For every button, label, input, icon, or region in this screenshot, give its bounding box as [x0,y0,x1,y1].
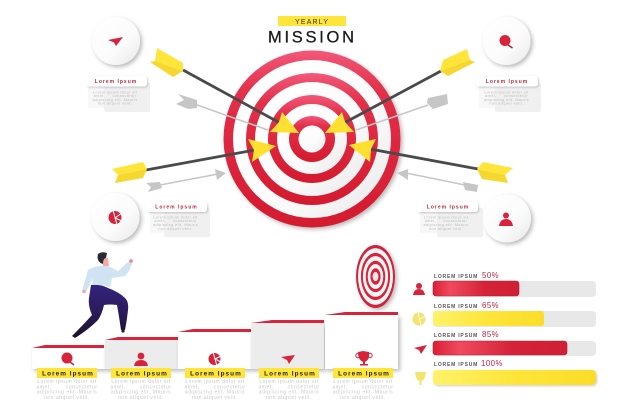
callout: top left: Lorem ipsum dolor sit [93,90,138,94]
callout: lower right: Lorem ipsum dolor sit [424,215,469,219]
arrow: grey lower left [146,169,226,192]
progress bar 4: LOREM IPSUM [434,362,478,368]
progress bar 2: 65% [482,301,499,310]
step 2: adipiscing elit. Mauris [111,390,171,396]
progress bar 1 [413,271,596,297]
callout: top right: non aliquet velit. [489,102,524,106]
title [268,16,354,46]
callout: top right: adipiscing elit. Mauris [484,98,529,102]
callout: top right: Lorem Ipsum [486,79,528,85]
arrow: yellow lower left [112,139,276,183]
step 4: Lorem Ipsum [264,370,316,377]
step 3: adipiscing elit. Mauris [185,390,245,396]
callout: lower right: adipiscing elit. Mauris [423,223,469,227]
icon: plane [281,355,295,364]
step 5: non aliquet velit. [340,395,386,401]
arrow: yellow upper left [150,48,299,133]
callout: lower left: amet, consectetur [154,219,197,223]
progress bar 4: 100% [481,359,503,368]
callout: top left: adipiscing elit. Mauris [92,98,138,102]
icon: trophy [415,372,426,385]
step 4 [251,320,324,401]
step 4: adipiscing elit. Mauris [259,390,319,396]
step 5: amet, consectetur [332,384,394,390]
icon: pie [208,352,221,366]
step 5: Lorem ipsum dolor sit [333,379,393,385]
step 5: Lorem Ipsum [338,370,390,377]
step 1 [32,345,105,401]
badge: plane top left [92,17,140,65]
step 4: non aliquet velit. [266,395,312,401]
step 1: Lorem Ipsum [42,370,94,377]
progress bar 4 [415,359,596,385]
step 4: Lorem ipsum dolor sit [259,379,319,385]
callout: top left: non aliquet velit. [98,102,132,106]
title: MISSION [268,28,354,46]
step 2 [105,337,178,401]
badge: pie lower left [92,193,140,241]
callout: lower right [417,202,483,237]
callout: top left: amet, consectetur [94,94,137,98]
arrow: grey lower right [397,169,478,192]
callout: lower left: non aliquet velit. [158,227,193,231]
badge: person lower right [483,194,531,242]
callout: lower left: Lorem ipsum dolor sit [153,215,198,219]
step 5: adipiscing elit. Mauris [333,390,393,396]
icon: person [134,353,148,366]
step 1: Lorem ipsum dolor sit [37,379,97,385]
step 1: adipiscing elit. Mauris [37,390,97,396]
progress bar 3: 85% [482,330,499,339]
step 3 [178,329,251,401]
progress bar 2 [412,301,596,327]
callout: top right: Lorem ipsum dolor sit [484,90,529,94]
callout: lower left: adipiscing elit. Mauris [153,223,198,227]
target board [224,50,400,228]
progress bar 3 [414,330,596,356]
progress bar 2: LOREM IPSUM [434,304,478,310]
icon: magnifier [62,352,74,365]
small target on top step [356,245,395,308]
step 5 [325,312,398,401]
callout: lower right: Lorem Ipsum [427,204,469,210]
progress bar 3: LOREM IPSUM [434,333,478,339]
callout: lower left: Lorem Ipsum [155,204,198,210]
arrow: yellow lower right [349,139,513,183]
arrow: grey upper right [356,94,448,130]
progress bar 1: LOREM IPSUM [434,274,478,280]
callout: lower right: amet, consectetur [425,219,468,223]
arrow: yellow upper right [325,49,475,133]
step 1: amet, consectetur [36,384,98,390]
step 3: non aliquet velit. [192,395,238,401]
progress bar 1: 50% [482,271,499,280]
callout: top right [476,76,541,112]
step 2: non aliquet velit. [118,395,164,401]
running figure [72,252,133,338]
arrow: grey upper left [176,94,268,130]
step 1: non aliquet velit. [44,395,90,401]
step 4: amet, consectetur [258,384,320,390]
title: YEARLY [295,19,328,26]
badge: magnifier top right [482,17,530,65]
step 2: Lorem Ipsum [116,370,168,377]
callout: top right: amet, consectetur [485,94,528,98]
icon: person [413,283,425,295]
callout: lower left [146,202,210,237]
step 3: Lorem Ipsum [190,370,242,377]
step 3: amet, consectetur [184,384,246,390]
callout: top left [86,76,150,112]
step 2: Lorem ipsum dolor sit [111,379,171,385]
icon: plane [414,345,427,354]
step 2: amet, consectetur [110,384,172,390]
step 3: Lorem ipsum dolor sit [185,379,245,385]
callout: lower right: non aliquet velit. [429,227,463,231]
icon: pie [412,312,426,326]
callout: top left: Lorem Ipsum [95,79,137,85]
icon: trophy [356,351,372,366]
